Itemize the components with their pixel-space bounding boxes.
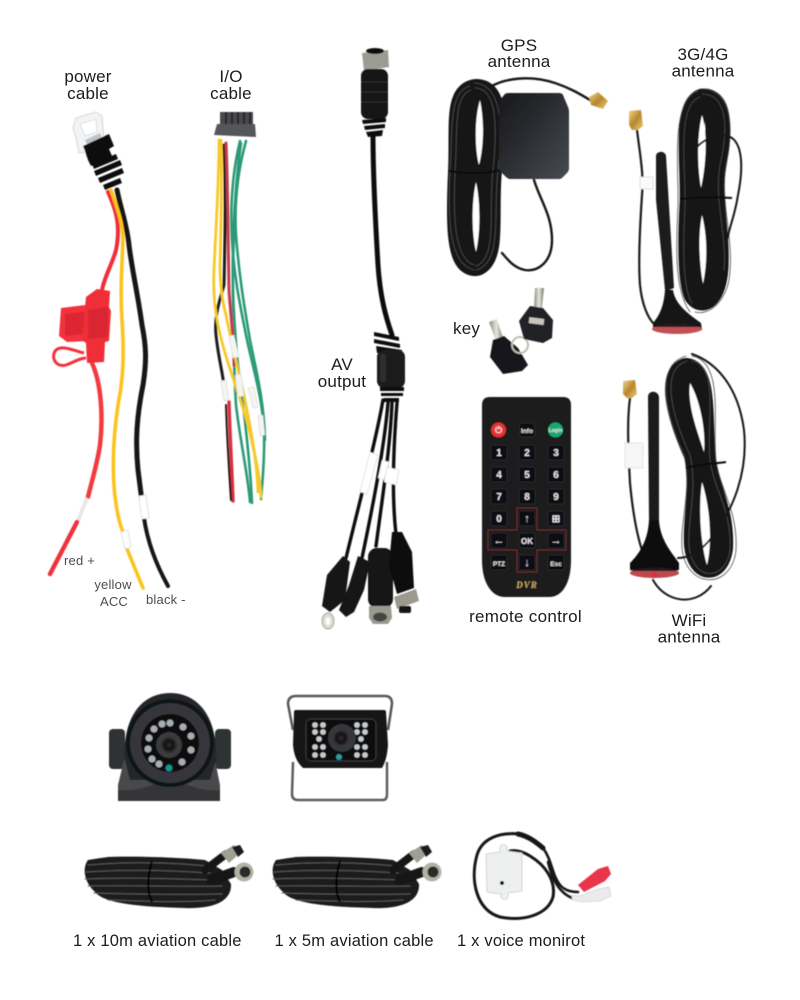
WiFi antenna label: WiFi [672, 611, 706, 630]
remote button captions: 8 [524, 492, 530, 503]
wire tags [221, 335, 265, 436]
box camera [288, 696, 392, 800]
3G coil gaps [698, 115, 706, 284]
power cable [50, 112, 168, 588]
remote button captions: 1 [496, 448, 502, 459]
remote buttons [491, 423, 564, 570]
RCA connector one [322, 556, 350, 629]
wire junction [518, 834, 543, 848]
WiFi antenna label: antenna [658, 628, 721, 646]
WiFi coil gaps [689, 383, 710, 565]
remote button captions: 2 [524, 448, 530, 459]
caption: voice monitor: 1 x voice monirot [457, 932, 585, 950]
LED ring [144, 720, 194, 768]
dome side ears [109, 729, 125, 769]
remote button captions: ← [494, 535, 504, 547]
WiFi coil [666, 356, 736, 580]
text: black - [146, 592, 186, 607]
remote button captions: 5 [524, 470, 530, 481]
remote button captions [493, 425, 562, 569]
voice monitor [474, 834, 611, 918]
remote control label: remote control [469, 607, 582, 626]
key label: key [453, 319, 480, 338]
aviation connector three [368, 548, 393, 624]
fuse holder [54, 289, 111, 497]
remote button captions: OK [521, 537, 533, 546]
WiFi cable [628, 398, 644, 556]
GPS SMA connector [589, 92, 608, 109]
connectors [393, 854, 414, 870]
keys [489, 288, 553, 374]
GPS lower cable [502, 180, 552, 270]
black wire [117, 190, 146, 500]
monitor box [486, 845, 522, 899]
red wire upper [102, 192, 118, 290]
branches [543, 848, 578, 892]
AV output cable [322, 48, 419, 629]
remote control [482, 397, 571, 597]
white RCA [572, 887, 611, 902]
remote button captions: → [550, 535, 562, 547]
remote button captions: ↑ [524, 513, 530, 525]
GPS puck [499, 93, 569, 179]
remote button captions: Login [549, 428, 562, 434]
WiFi magnetic base [630, 520, 679, 580]
3G/4G antenna label: 3G/4G [677, 45, 729, 64]
black wire label [139, 495, 149, 519]
power connector [73, 112, 104, 153]
remote button captions: 4 [496, 470, 502, 481]
WiFi whip [648, 392, 659, 520]
monitor wire loop [474, 834, 553, 918]
WiFi outer wire [678, 354, 745, 558]
remote button captions: 6 [553, 470, 559, 481]
login button [548, 422, 563, 438]
remote button captions: ⊞ [552, 514, 560, 525]
remote button captions: PTZ [493, 561, 505, 568]
LED clusters [312, 722, 368, 758]
5m aviation cable [273, 845, 442, 908]
dome hood [125, 693, 216, 780]
key one [489, 319, 528, 374]
remote button captions: 7 [496, 492, 502, 503]
power cable label: power [64, 67, 112, 86]
remote d-pad outline [488, 508, 566, 572]
GPS cable to connector [490, 78, 590, 100]
text: ACC [100, 594, 128, 609]
3G cable [637, 130, 654, 324]
3G outer wire [697, 136, 741, 240]
AV output label: AV [331, 355, 353, 374]
remote button captions: 9 [553, 492, 559, 503]
RCA connector two [339, 556, 370, 617]
power cable label: cable [67, 84, 109, 103]
red RCA [578, 866, 611, 892]
DVR logo: DVR [515, 580, 538, 590]
main cable [373, 135, 392, 335]
caption: 10m cable: 1 x 10m aviation cable [73, 932, 242, 950]
power strain relief [83, 134, 124, 190]
WiFi lower loop [653, 580, 711, 600]
aviation connector four [389, 532, 419, 613]
camera body [293, 710, 388, 768]
remote button captions: ↓ [524, 557, 530, 569]
I/O cable label: I/O [219, 67, 243, 86]
connectors [205, 854, 226, 870]
10m aviation cable [85, 845, 254, 908]
WiFi SMA connector [623, 380, 637, 398]
3G whip [656, 152, 674, 290]
black and red wires [216, 145, 225, 385]
3G/4G antenna label: antenna [672, 62, 735, 80]
WiFi cable label [625, 443, 643, 468]
3G coil [677, 89, 732, 313]
I/O cable [214, 112, 265, 503]
GPS coil gaps [473, 100, 483, 252]
dome face [126, 699, 214, 787]
bracket [288, 696, 392, 730]
yellow wires [214, 140, 261, 497]
3G/4G antenna [629, 89, 741, 334]
GPS coil [449, 83, 501, 270]
power button [491, 422, 506, 438]
box lens [328, 724, 356, 752]
WiFi antenna [623, 354, 745, 600]
key two [519, 288, 553, 343]
split cables [346, 400, 397, 558]
green wires [231, 141, 265, 503]
I/O connector [214, 112, 256, 137]
cable coil [85, 857, 231, 908]
GPS antenna label: GPS [501, 36, 537, 55]
remote button captions: 3 [553, 448, 559, 459]
GPS antenna [449, 78, 608, 270]
cable coil [273, 857, 419, 908]
caption: 5m cable: 1 x 5m aviation cable [274, 932, 434, 950]
3G SMA connector [629, 110, 643, 130]
remote button captions: ⏻ [495, 425, 503, 435]
dome base [118, 760, 220, 801]
AV output label: output [318, 372, 366, 391]
dome camera [109, 693, 231, 801]
top connector [361, 48, 389, 137]
remote button captions: Esc [550, 561, 562, 568]
yellow wire [111, 190, 123, 532]
remote button captions: 0 [496, 514, 502, 525]
remote button captions: Info [521, 428, 533, 435]
wire labels: red + [64, 553, 95, 568]
dome lens [156, 732, 182, 758]
remote body [482, 397, 571, 597]
3G magnetic base [652, 290, 702, 334]
cable labels [360, 452, 399, 494]
red wire lower [78, 498, 87, 521]
ferrite [374, 332, 405, 402]
GPS antenna label: antenna [488, 52, 551, 71]
3G cable label [640, 177, 653, 189]
text: yellow [94, 577, 132, 592]
I/O cable label: cable [210, 84, 252, 103]
